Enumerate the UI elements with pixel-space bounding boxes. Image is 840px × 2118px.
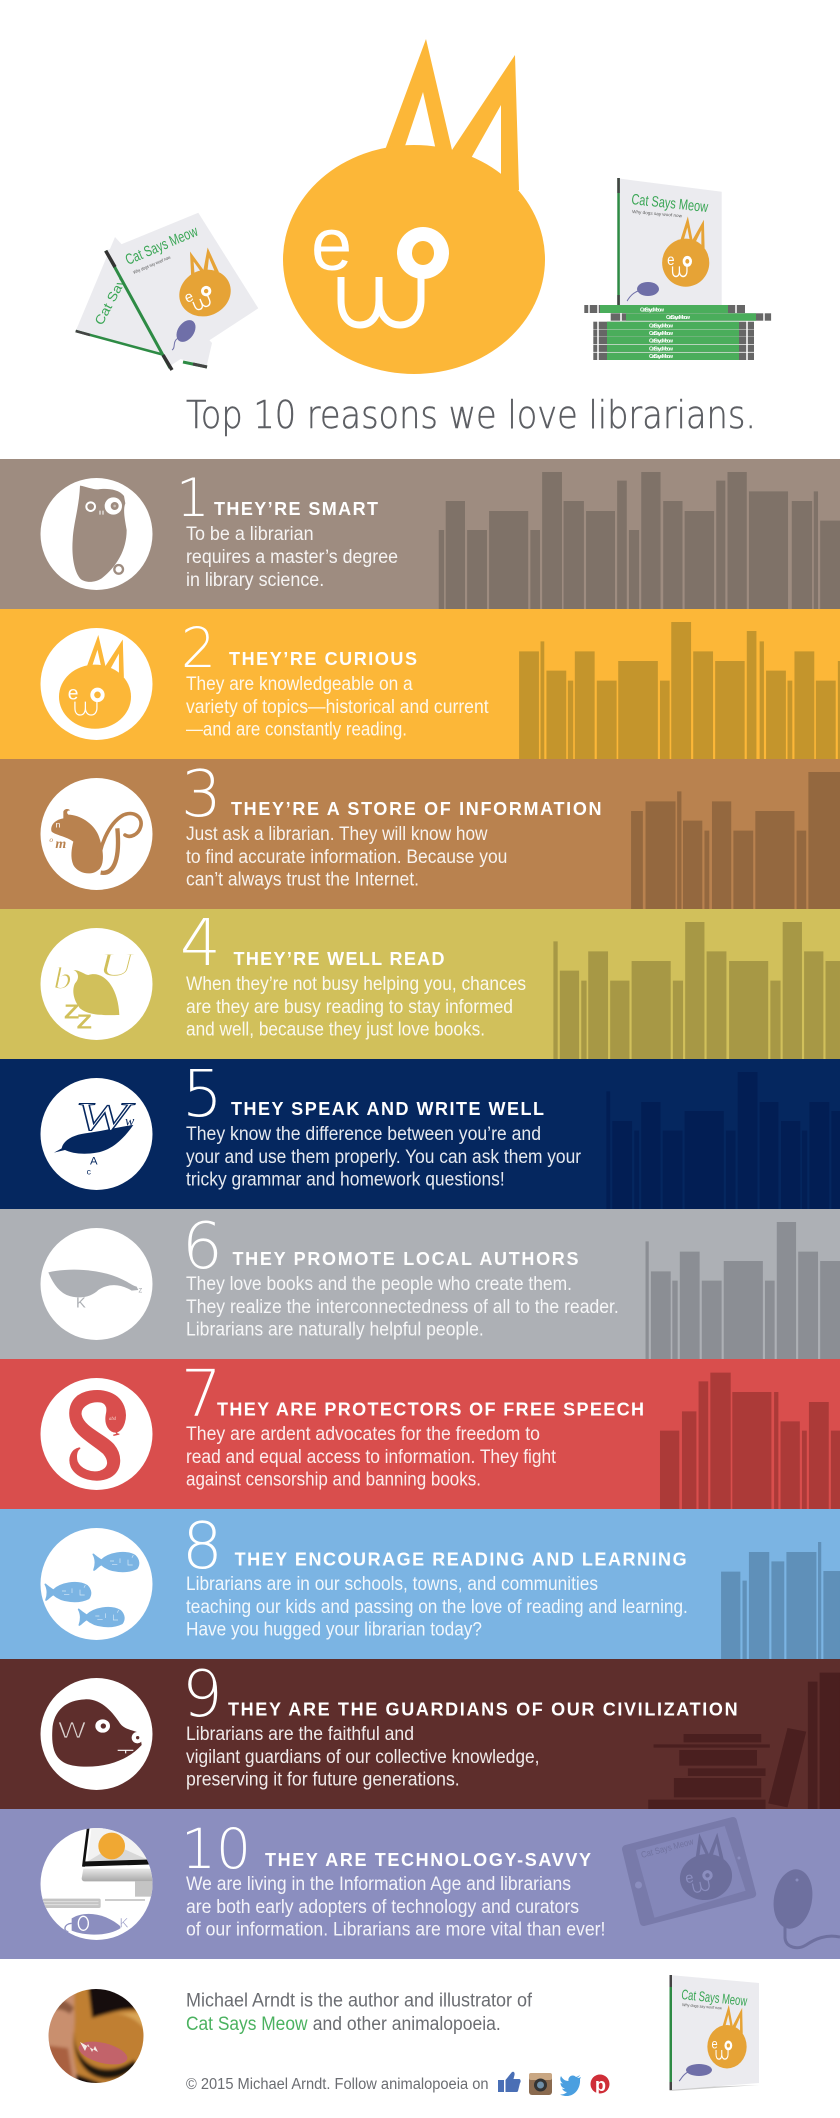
icon: bird: c bbox=[87, 1167, 92, 1177]
number 3: 3 bbox=[181, 758, 222, 832]
bookshelf silhouette 8 bbox=[721, 1542, 840, 1659]
body 9: Librarians are the faithful and bbox=[186, 1724, 414, 1745]
footer book: Cat Says Meow bbox=[681, 1986, 749, 2009]
bookshelf silhouette 2 bbox=[519, 622, 840, 759]
icon: snake: abd bbox=[109, 1417, 117, 1422]
body 2: They are knowledgeable on a bbox=[186, 674, 413, 695]
bookshelf silhouette 3 bbox=[631, 772, 840, 909]
body 8: Have you hugged your librarian today? bbox=[186, 1620, 482, 1640]
icon: cat: e bbox=[68, 682, 78, 705]
right book with stack of spines bbox=[584, 178, 771, 360]
body 3: can’t always trust the Internet. bbox=[186, 870, 419, 890]
icon: squirrel bbox=[40, 778, 152, 890]
heading 5: THEY SPEAK AND WRITE WELL bbox=[231, 1099, 544, 1119]
body 1: To be a librarian bbox=[186, 524, 314, 545]
body 8: teaching our kids and passing on the love of reading and learning. bbox=[186, 1597, 688, 1618]
icon: cat bbox=[40, 628, 152, 740]
icon: bird: w bbox=[125, 1115, 135, 1130]
number 4: 4 bbox=[180, 907, 221, 981]
body 3: Just ask a librarian. They will know how bbox=[186, 824, 488, 845]
body 2: variety of topics—historical and current bbox=[186, 697, 489, 718]
spine rows: Cat Says Meow bbox=[649, 354, 674, 360]
body 9: vigilant guardians of our collective knowledge, bbox=[186, 1747, 540, 1768]
icon: squirrel: o bbox=[49, 835, 53, 844]
panel 2: they're curious bbox=[0, 609, 840, 759]
author text: and other animalopoeia. bbox=[313, 2014, 501, 2035]
spine rows: Cat Says Meow bbox=[666, 315, 691, 321]
icon: dog bbox=[40, 1678, 152, 1790]
panel 10: they are technology-savvy bbox=[0, 1809, 840, 1959]
panel 9: they are the guardians of our civilization bbox=[0, 1658, 840, 1809]
icon: snake bbox=[40, 1378, 152, 1490]
spine rows bbox=[584, 305, 771, 360]
footer book: Why dogs say woof now bbox=[682, 2002, 722, 2010]
spine rows: Cat Says Meow bbox=[649, 331, 674, 337]
number 5: 5 bbox=[182, 1058, 223, 1132]
bookshelf silhouette 1 bbox=[439, 472, 840, 609]
right book with stack of spines: Cat Says Meow bbox=[631, 191, 709, 216]
panel 8: they encourage reading and learning bbox=[0, 1509, 840, 1659]
bookshelf silhouette 6 bbox=[646, 1222, 840, 1359]
tablet silhouette bbox=[626, 1821, 752, 1922]
body 10: of our information. Librarians are more vital than ever! bbox=[186, 1920, 605, 1940]
panel 3: they're a store of information bbox=[0, 758, 840, 909]
number 2: 2 bbox=[181, 616, 216, 680]
icon: bee: Z bbox=[64, 1000, 80, 1023]
body 6: They love books and the people who create them. bbox=[186, 1274, 572, 1295]
body 5 bbox=[186, 1124, 582, 1190]
body 8: Librarians are in our schools, towns, and communities bbox=[186, 1574, 598, 1595]
left book pile bbox=[76, 213, 258, 370]
icon: dog: W bbox=[58, 1717, 87, 1743]
spine rows: Cat Says Meow bbox=[649, 324, 674, 330]
spine rows: Cat Says Meow bbox=[649, 338, 674, 344]
body 10: are both early adopters of technology and curators bbox=[186, 1897, 579, 1918]
author text: Cat Says Meow bbox=[186, 2014, 308, 2035]
left book pile: e bbox=[182, 289, 196, 307]
icon: hen bbox=[40, 1228, 152, 1340]
computer mouse silhouette bbox=[769, 1866, 840, 1948]
body 4: When they’re not busy helping you, chances bbox=[186, 974, 526, 995]
hero: orange cat bbox=[283, 39, 545, 374]
body 9 bbox=[186, 1724, 540, 1790]
body 2 bbox=[186, 674, 489, 740]
body 5: They know the difference between you’re and bbox=[186, 1124, 541, 1145]
pile of books silhouette bbox=[648, 1673, 840, 1809]
body 4: are they are busy reading to stay informed bbox=[186, 997, 513, 1018]
bookshelf silhouette 4 bbox=[553, 922, 840, 1059]
body 10 bbox=[186, 1874, 605, 1940]
heading 3: THEY’RE A STORE OF INFORMATION bbox=[231, 799, 602, 819]
right book with stack of spines: Why dogs say woof now bbox=[632, 209, 683, 218]
icon: bee: U bbox=[98, 947, 136, 984]
body 1 bbox=[186, 524, 398, 591]
tablet silhouette: e bbox=[684, 1870, 695, 1887]
left book pile: Cat Says Meow bbox=[123, 223, 201, 269]
icon: squirrel: m bbox=[55, 837, 66, 852]
heading 10: THEY ARE TECHNOLOGY-SAVVY bbox=[265, 1850, 591, 1870]
heading 2: THEY’RE CURIOUS bbox=[229, 649, 417, 669]
copyright line: © 2015 Michael Arndt. Follow animalopoeia on bbox=[186, 2076, 488, 2093]
icon: hen: z bbox=[138, 1285, 142, 1294]
icon: pinterest bbox=[590, 2074, 610, 2095]
heading 6: THEY PROMOTE LOCAL AUTHORS bbox=[232, 1249, 578, 1269]
body 4: and well, because they just love books. bbox=[186, 1020, 485, 1040]
number 6: 6 bbox=[182, 1210, 223, 1284]
body 6: Librarians are naturally helpful people. bbox=[186, 1320, 484, 1340]
bookshelf silhouette 5 bbox=[606, 1072, 840, 1209]
icon: thumbs up bbox=[498, 2072, 521, 2092]
panel 6: they promote local authors bbox=[0, 1209, 840, 1359]
panel 1: they're smart bbox=[0, 459, 840, 609]
panel 7: they are protectors of free speech bbox=[0, 1358, 840, 1509]
number 9: 9 bbox=[182, 1658, 223, 1732]
icon: fish bbox=[40, 1528, 152, 1640]
heading 1: THEY’RE SMART bbox=[214, 499, 378, 519]
icon: bird: A bbox=[90, 1155, 98, 1167]
body 7: read and equal access to information. They fight bbox=[186, 1447, 557, 1468]
body 7: They are ardent advocates for the freedom to bbox=[186, 1424, 540, 1445]
body 5: tricky grammar and homework questions! bbox=[186, 1170, 505, 1190]
body 6: They realize the interconnectedness of all to the reader. bbox=[186, 1297, 619, 1318]
body 6 bbox=[186, 1274, 619, 1340]
panel 4: they're well read bbox=[0, 907, 840, 1059]
footer book bbox=[670, 1975, 759, 2091]
body 5: your and use them properly. You can ask them your bbox=[186, 1147, 582, 1168]
icon: pinterest: p bbox=[595, 2075, 606, 2095]
body 10: We are living in the Information Age and librarians bbox=[186, 1874, 571, 1895]
spine rows: Cat Says Meow bbox=[640, 308, 665, 314]
left book pile: Cat Says bbox=[91, 269, 132, 327]
left book pile: Why dogs say woof now bbox=[132, 254, 172, 275]
number 1: 1 bbox=[176, 468, 210, 529]
icon: hen: K bbox=[76, 1295, 86, 1311]
icon: computer and mouse: K bbox=[119, 1915, 129, 1931]
right book with stack of spines: e bbox=[667, 252, 675, 269]
heading 9: THEY ARE THE GUARDIANS OF OUR CIVILIZATION bbox=[228, 1700, 738, 1720]
author photo bbox=[48, 1989, 144, 2083]
icon: bee: b bbox=[53, 961, 72, 995]
icon: squirrel: n bbox=[56, 819, 61, 829]
body 4 bbox=[186, 974, 526, 1040]
author text: Michael Arndt is the author and illustrator of bbox=[186, 1990, 533, 2012]
footer book: e bbox=[712, 2036, 718, 2052]
icon: bee: Z bbox=[77, 1010, 92, 1033]
icon: instagram bbox=[529, 2073, 552, 2095]
body 3 bbox=[186, 824, 507, 890]
heading 7: THEY ARE PROTECTORS OF FREE SPEECH bbox=[217, 1400, 644, 1420]
number 7: 7 bbox=[181, 1358, 222, 1432]
bookshelf silhouette 7 bbox=[660, 1373, 840, 1509]
body 2: —and are constantly reading. bbox=[186, 720, 407, 740]
body 8 bbox=[186, 1574, 688, 1640]
hero: orange cat: e bbox=[311, 203, 352, 286]
number 10: 10 bbox=[181, 1817, 251, 1881]
icon: computer and mouse bbox=[40, 1827, 153, 1940]
icon: bird bbox=[40, 1078, 152, 1190]
spine rows: Cat Says Meow bbox=[649, 346, 674, 352]
author text bbox=[186, 1990, 533, 2035]
tablet silhouette: Cat Says Meow bbox=[640, 1836, 695, 1860]
icon: owl bbox=[40, 478, 152, 590]
icon: bee bbox=[40, 928, 152, 1040]
title: Top 10 reasons we love librarians. bbox=[186, 393, 756, 437]
heading 8: THEY ENCOURAGE READING AND LEARNING bbox=[235, 1550, 687, 1570]
body 7: against censorship and banning books. bbox=[186, 1470, 481, 1490]
icon: bird: W bbox=[75, 1094, 136, 1139]
body 1: requires a master’s degree bbox=[186, 547, 398, 568]
panel 5: they speak and write well bbox=[0, 1058, 840, 1209]
icon: twitter bbox=[560, 2075, 581, 2096]
body 1: in library science. bbox=[186, 570, 324, 591]
body 9: preserving it for future generations. bbox=[186, 1770, 460, 1790]
body 3: to find accurate information. Because you bbox=[186, 847, 507, 868]
body 7 bbox=[186, 1424, 557, 1490]
heading 4: THEY’RE WELL READ bbox=[234, 949, 444, 969]
number 8: 8 bbox=[182, 1510, 223, 1584]
